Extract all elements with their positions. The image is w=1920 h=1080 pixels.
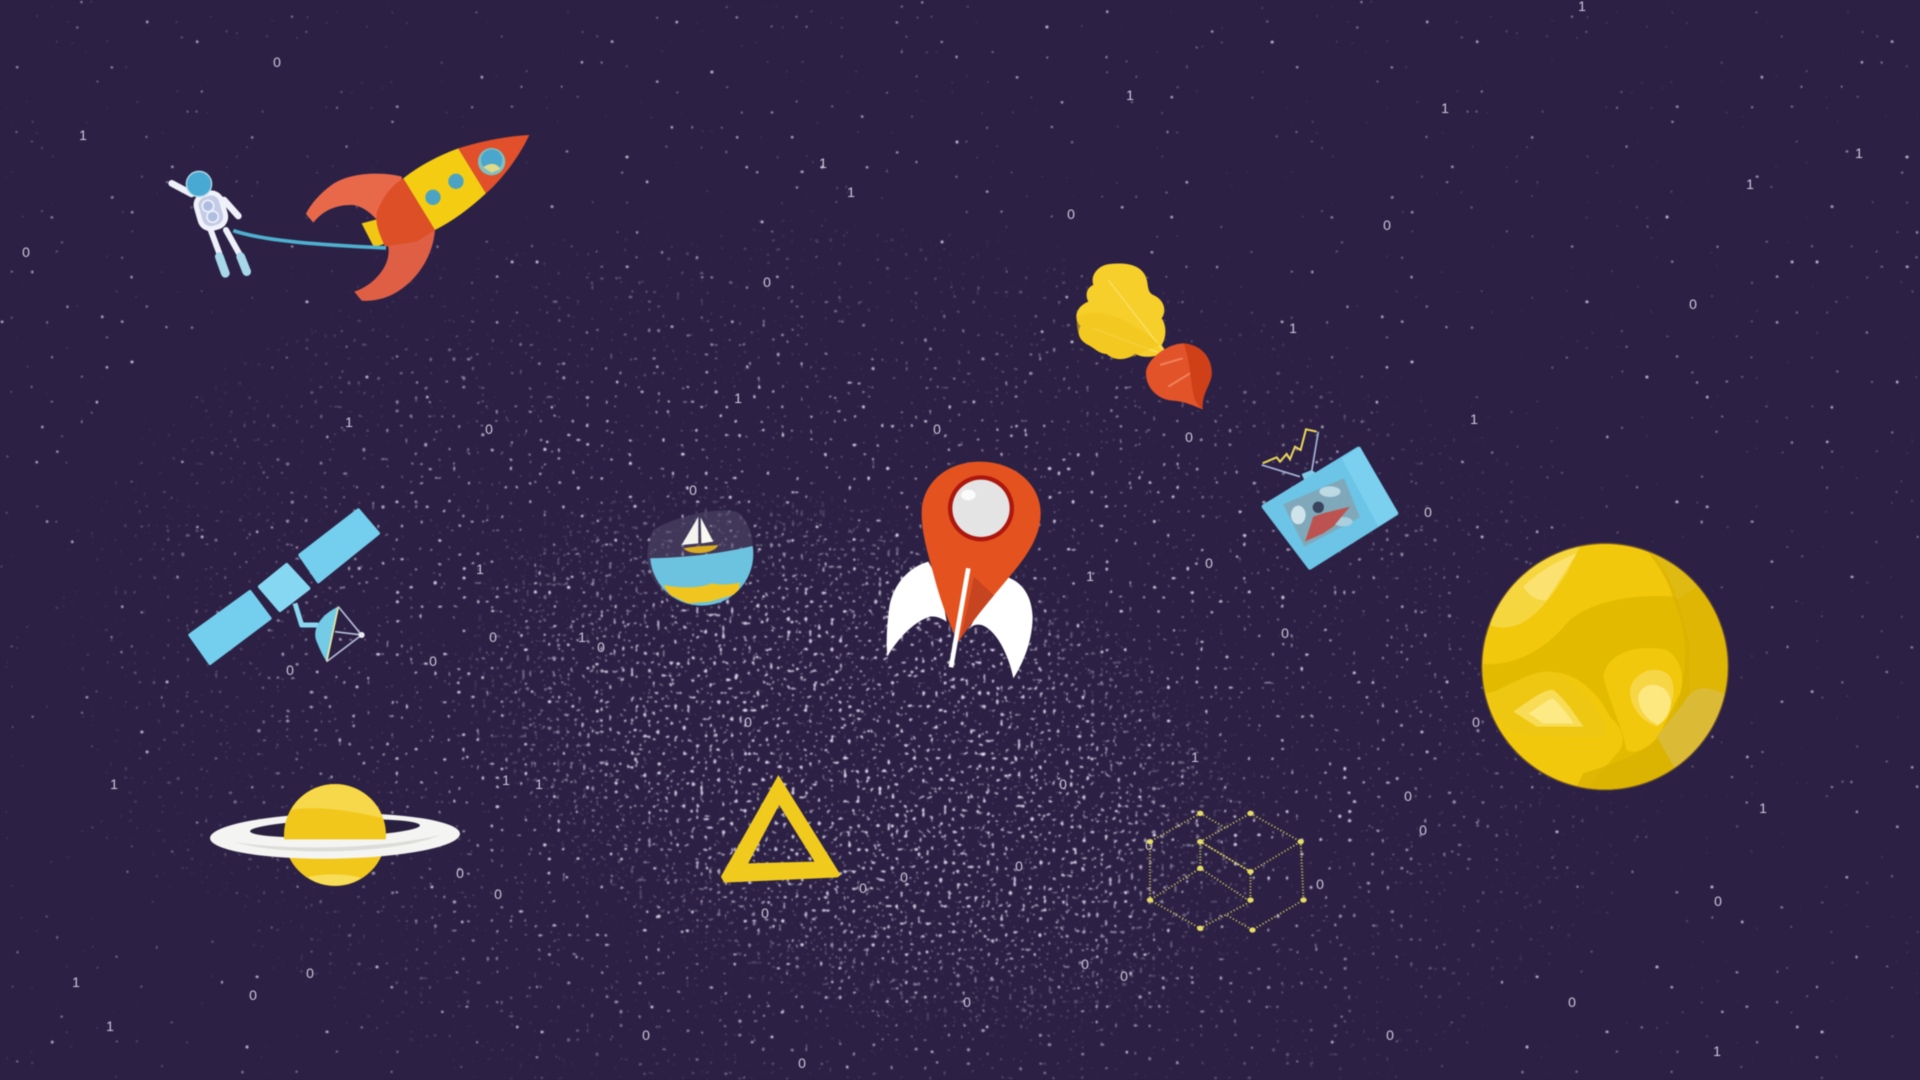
icon: astronaut — [172, 171, 247, 273]
starfield of binary digits: 0 — [763, 274, 771, 290]
starfield of binary digits: 1 — [1126, 87, 1134, 103]
starfield of binary digits: 1 — [1289, 320, 1297, 336]
starfield of binary digits: 0 — [1059, 776, 1067, 792]
starfield of binary digits: 0 — [306, 965, 314, 981]
starfield of binary digits: 0 — [1386, 1027, 1394, 1043]
starfield of binary digits: 0 — [900, 869, 908, 885]
starfield of binary digits: 1 — [502, 772, 510, 788]
starfield of binary digits: 1 — [847, 184, 855, 200]
starfield of binary digits: 0 — [489, 629, 497, 645]
starfield of binary digits: 0 — [456, 865, 464, 881]
starfield of binary digits: 0 — [1383, 217, 1391, 233]
starfield of binary digits: 0 — [1404, 788, 1412, 804]
starfield of binary digits: 0 — [1472, 714, 1480, 730]
starfield of binary digits: 0 — [1067, 206, 1075, 222]
starfield of binary digits: 0 — [689, 482, 697, 498]
starfield of binary digits: 1 — [1746, 176, 1754, 192]
icon: yellow triangle — [721, 775, 841, 883]
starfield of binary digits: 0 — [485, 421, 493, 437]
starfield of binary digits: 0 — [597, 639, 605, 655]
starfield of binary digits: 0 — [1281, 625, 1289, 641]
icon: autumn leaves — [1076, 264, 1212, 409]
icon: ringed planet — [210, 780, 460, 896]
starfield of binary digits: 1 — [1191, 749, 1199, 765]
icon: satellite — [190, 510, 378, 663]
starfield of binary digits: 0 — [1568, 994, 1576, 1010]
starfield of binary digits: 0 — [642, 1027, 650, 1043]
starfield of binary digits: 0 — [1081, 956, 1089, 972]
starfield of binary digits: 0 — [1120, 968, 1128, 984]
starfield of binary digits: 0 — [1185, 429, 1193, 445]
starfield of binary digits: 0 — [286, 662, 294, 678]
starfield of binary digits: 0 — [1015, 858, 1023, 874]
red leaf — [1146, 343, 1212, 409]
starfield of binary digits: 1 — [1855, 145, 1863, 161]
starfield of binary digits: 1 — [819, 155, 827, 171]
starfield of binary digits: 1 — [1759, 800, 1767, 816]
icon: large golden planet — [1480, 542, 1730, 792]
starfield of binary digits: 1 — [79, 127, 87, 143]
starfield of binary digits: 0 — [22, 244, 30, 260]
starfield of binary digits: 0 — [1424, 504, 1432, 520]
astronaut tethered to rocket — [172, 135, 529, 301]
icon: location pin rocket — [887, 462, 1041, 678]
starfield of binary digits: 0 — [1689, 296, 1697, 312]
starfield of binary digits: 0 — [798, 1055, 806, 1071]
starfield of binary digits: 1 — [110, 776, 118, 792]
icon: retro television — [1262, 429, 1398, 567]
starfield of binary digits: 1 — [345, 414, 353, 430]
starfield of binary digits: 0 — [761, 905, 769, 921]
starfield of binary digits: 0 — [963, 994, 971, 1010]
yellow leaf — [1076, 264, 1166, 359]
starfield of binary digits: 0 — [273, 54, 281, 70]
starfield of binary digits: 1 — [476, 561, 484, 577]
tether — [233, 231, 386, 248]
starfield of binary digits: 1 — [1713, 1043, 1721, 1059]
icon: boat in a bowl — [643, 510, 757, 610]
starfield of binary digits: 0 — [1714, 893, 1722, 909]
starfield of binary digits: 1 — [578, 629, 586, 645]
starfield of binary digits: 0 — [1316, 876, 1324, 892]
starfield of binary digits: 0 — [429, 653, 437, 669]
starfield of binary digits: 0 — [1419, 822, 1427, 838]
starfield of binary digits: 1 — [72, 974, 80, 990]
starfield of binary digits: 1 — [1470, 411, 1478, 427]
starfield of binary digits: 0 — [933, 421, 941, 437]
starfield of binary digits: 0 — [1205, 555, 1213, 571]
starfield of binary digits: 1 — [1441, 100, 1449, 116]
starfield of binary digits: 1 — [106, 1018, 114, 1034]
starfield of binary digits: 0 — [494, 886, 502, 902]
starfield of binary digits: 0 — [1145, 837, 1153, 853]
starfield of binary digits: 0 — [859, 880, 867, 896]
starfield of binary digits: 1 — [734, 390, 742, 406]
starfield of binary digits: 0 — [744, 714, 752, 730]
starfield of binary digits: 0 — [249, 987, 257, 1003]
icon: dotted wireframe cubes — [1147, 811, 1307, 933]
starfield of binary digits: 1 — [1086, 568, 1094, 584]
starfield of binary digits: 1 — [535, 776, 543, 792]
icon: rocket — [306, 135, 529, 301]
